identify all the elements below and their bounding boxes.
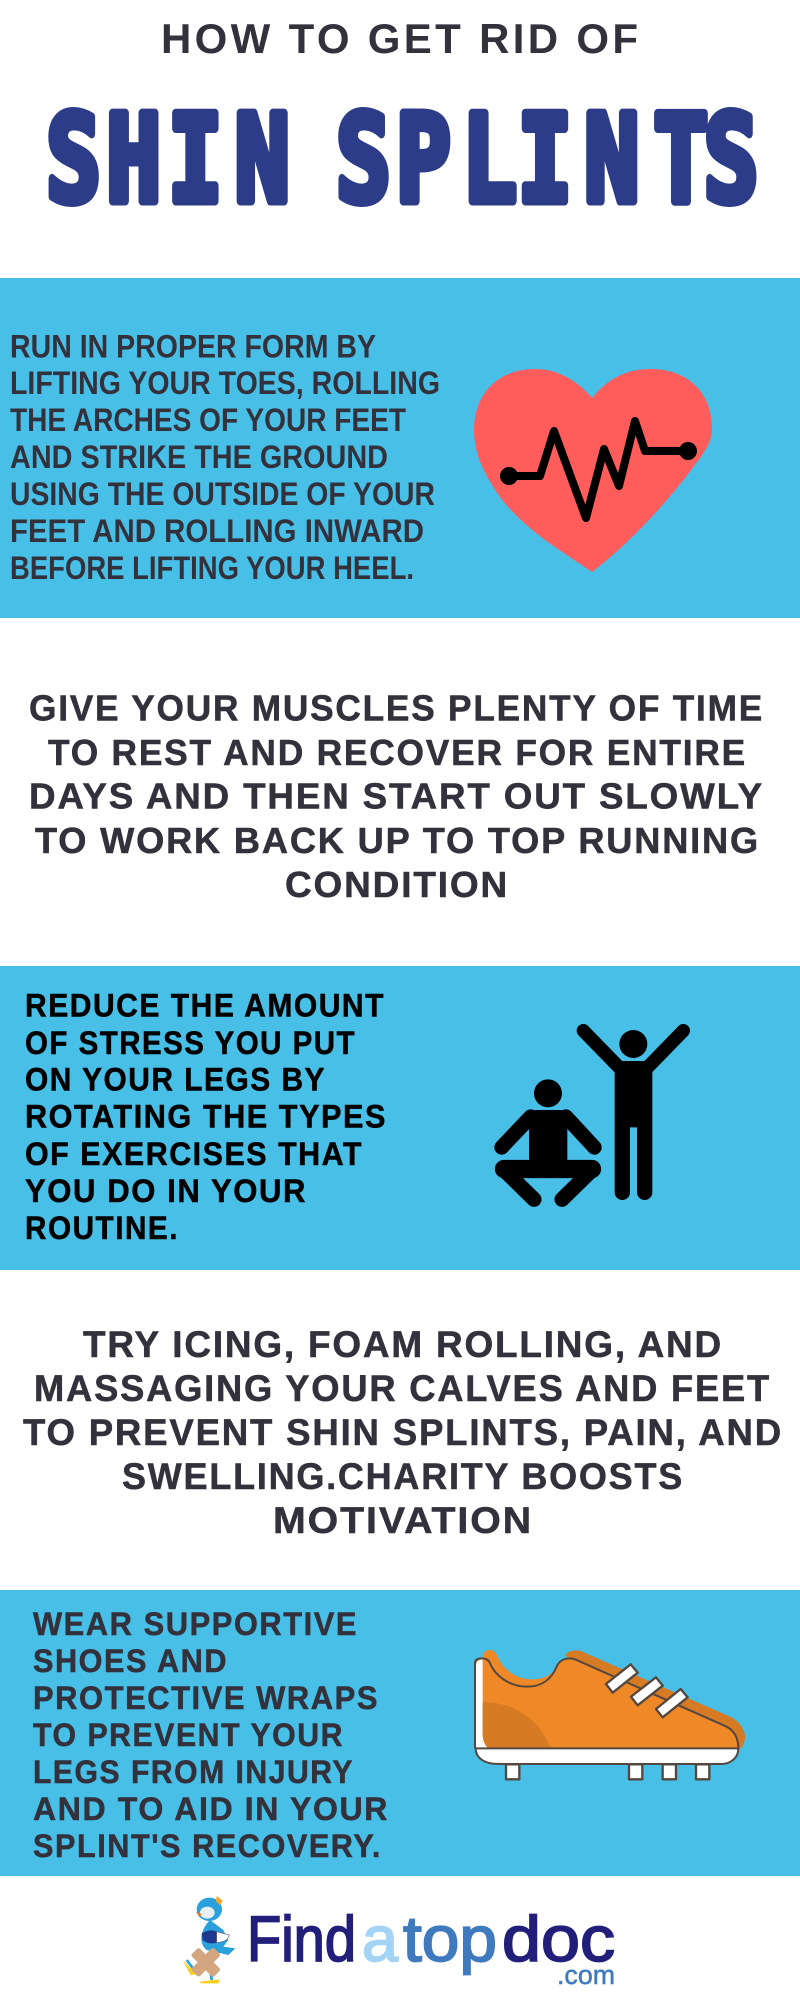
text block: rotate exercises: YOU DO IN YOUR bbox=[25, 1173, 307, 1209]
text block: icing and rolling bbox=[23, 1324, 783, 1541]
text block: proper form: AND STRIKE THE GROUND bbox=[10, 439, 388, 475]
text block: rest and recover bbox=[29, 688, 764, 905]
panel: supportive shoes bbox=[0, 1590, 800, 1876]
text block: shoes and wraps: SHOES AND bbox=[33, 1643, 228, 1679]
text block: proper form: LIFTING YOUR TOES, ROLLING bbox=[10, 365, 440, 401]
text block: rotate exercises: ROUTINE. bbox=[25, 1210, 179, 1246]
icon: heart with pulse bbox=[474, 369, 712, 572]
panel: run in proper form bbox=[0, 278, 800, 618]
text block: shoes and wraps: LEGS FROM INJURY bbox=[33, 1754, 354, 1790]
heading: how to get rid of: HOW TO GET RID OF bbox=[161, 15, 638, 62]
text block: icing and rolling: MASSAGING YOUR CALVES AND FEET bbox=[34, 1368, 771, 1409]
wordmark: doc bbox=[502, 1903, 615, 1975]
icon: duck mascot bbox=[183, 1896, 235, 1983]
text block: icing and rolling: TO PREVENT SHIN SPLINTS, PAIN, AND bbox=[23, 1412, 783, 1453]
text block: shoes and wraps: WEAR SUPPORTIVE bbox=[33, 1606, 358, 1642]
domain suffix: .com bbox=[557, 1960, 615, 1990]
text block: rest and recover: GIVE YOUR MUSCLES PLENTY OF TIME bbox=[29, 688, 764, 729]
text block: rotate exercises: OF STRESS YOU PUT bbox=[25, 1025, 356, 1061]
text block: rotate exercises bbox=[25, 988, 387, 1246]
title: shin splints: SHIN SPLINTS bbox=[46, 91, 759, 230]
wordmark: Find bbox=[247, 1903, 356, 1975]
text block: proper form: USING THE OUTSIDE OF YOUR bbox=[10, 476, 435, 512]
text block: proper form: BEFORE LIFTING YOUR HEEL. bbox=[10, 550, 414, 586]
text block: rotate exercises: REDUCE THE AMOUNT bbox=[25, 988, 385, 1024]
text block: proper form bbox=[10, 328, 440, 586]
text block: icing and rolling: SWELLING.CHARITY BOOSTS bbox=[122, 1456, 684, 1497]
icon: exercising figures bbox=[502, 1030, 683, 1200]
logo: findatopdoc bbox=[183, 1896, 615, 1990]
text block: shoes and wraps bbox=[33, 1606, 389, 1864]
text block: icing and rolling: MOTIVATION bbox=[273, 1500, 533, 1541]
text block: shoes and wraps: AND TO AID IN YOUR bbox=[33, 1791, 389, 1827]
text block: proper form: RUN IN PROPER FORM BY bbox=[10, 328, 376, 364]
text block: shoes and wraps: PROTECTIVE WRAPS bbox=[33, 1680, 379, 1716]
icon: orange cleat shoe bbox=[475, 1650, 745, 1779]
text block: rest and recover: TO REST AND RECOVER FOR ENTIRE bbox=[48, 732, 747, 773]
text block: rotate exercises: ON YOUR LEGS BY bbox=[25, 1062, 326, 1098]
text block: rest and recover: TO WORK BACK UP TO TOP RUNNING bbox=[35, 820, 760, 861]
text block: rest and recover: DAYS AND THEN START OUT SLOWLY bbox=[29, 776, 764, 816]
text block: shoes and wraps: SPLINT'S RECOVERY. bbox=[33, 1828, 382, 1864]
text block: rotate exercises: OF EXERCISES THAT bbox=[25, 1136, 363, 1172]
wordmark: a bbox=[362, 1903, 398, 1975]
text block: rotate exercises: ROTATING THE TYPES bbox=[25, 1099, 387, 1135]
text block: proper form: THE ARCHES OF YOUR FEET bbox=[10, 402, 406, 438]
panel: reduce stress bbox=[0, 966, 800, 1270]
text block: proper form: FEET AND ROLLING INWARD bbox=[10, 513, 424, 549]
wordmark: top bbox=[403, 1903, 497, 1975]
text block: icing and rolling: TRY ICING, FOAM ROLLING, AND bbox=[83, 1324, 723, 1365]
text block: shoes and wraps: TO PREVENT YOUR bbox=[33, 1717, 344, 1753]
text block: rest and recover: CONDITION bbox=[285, 864, 509, 905]
